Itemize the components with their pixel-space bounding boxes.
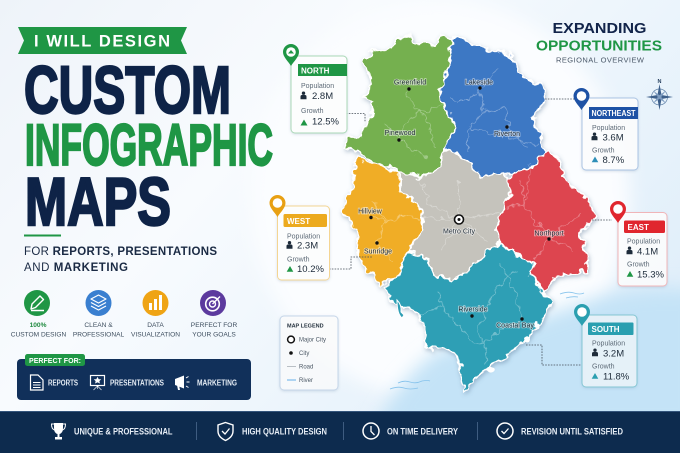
- icon: compass: [646, 79, 673, 110]
- city: Hillview: Hillview: [358, 208, 383, 216]
- legend: road: Road: [299, 364, 313, 370]
- card: north: Growth: [301, 108, 324, 115]
- legend: river: River: [299, 378, 313, 384]
- icon: 100% custom design: 100%: [30, 322, 47, 329]
- card: east: EAST: [628, 223, 649, 232]
- heading: expanding opportunities: REGIONAL OVERVIEW: [556, 56, 645, 64]
- card: west: Population: [287, 234, 320, 240]
- pin: north: [283, 44, 299, 66]
- title: custom infographic maps: CUSTOM: [24, 53, 231, 128]
- tag: perfect for: PERFECT FOR:: [29, 356, 81, 365]
- item: reports: [30, 375, 79, 390]
- icon: perfect for your goals: YOUR GOALS: [192, 332, 236, 338]
- item: marketing: [175, 376, 237, 390]
- city labels: [358, 80, 564, 330]
- heading: expanding opportunities: OPPORTUNITIES: [536, 38, 662, 54]
- card: northeast: 8.7%: [602, 155, 625, 166]
- card: west: Growth: [287, 256, 310, 264]
- icon: 100% custom design: CUSTOM DESIGN: [11, 332, 67, 338]
- card: northeast: Population: [592, 125, 625, 132]
- title: custom infographic maps: [24, 53, 273, 240]
- city: Northport: [534, 230, 564, 241]
- item: reports: REPORTS: [48, 378, 79, 388]
- city: Metro City: Metro City: [443, 228, 475, 236]
- region: north: [345, 35, 457, 177]
- rivers and roads: [372, 70, 580, 362]
- icon: clean and professional: [73, 290, 124, 338]
- card: north: NORTH: [301, 66, 330, 76]
- card: south: 3.2M: [603, 348, 624, 360]
- icon: perfect for your goals: [191, 290, 237, 338]
- pin: northeast: [574, 88, 590, 110]
- coastal islands: [397, 300, 530, 373]
- subtitle: AND MARKETING: [24, 262, 128, 274]
- banner: I will design: I WILL DESIGN: [34, 32, 170, 50]
- city: Pinewood: Pinewood: [385, 130, 415, 137]
- subtitle: FOR REPORTS, PRESENTATIONS: [24, 246, 217, 258]
- card: south: [574, 304, 637, 387]
- icon: perfect for your goals: PERFECT FOR: [191, 322, 237, 329]
- region: south: [385, 245, 552, 390]
- card: north: 2.8M: [312, 91, 333, 102]
- subtitle: [24, 246, 217, 274]
- card: west: WEST: [287, 217, 310, 226]
- footer bar: [0, 411, 680, 453]
- city: Greenfield: Greenfield: [394, 80, 426, 86]
- card: south: Growth: [592, 364, 615, 370]
- card: east: 4.1M: [637, 246, 658, 258]
- city: Metro City: [443, 215, 475, 236]
- legend: city: City: [299, 351, 309, 357]
- region: metro: [400, 150, 510, 280]
- city: Pinewood: [385, 130, 415, 142]
- city: Riverton: [494, 125, 520, 138]
- legend: MAP LEGEND: [287, 324, 324, 330]
- title: custom infographic maps: INFOGRAPHIC: [25, 113, 273, 178]
- item: unique and professional: UNIQUE & PROFESSIONAL: [74, 426, 173, 436]
- card: west: 2.3M: [297, 240, 318, 252]
- card: east: Population: [627, 238, 660, 246]
- card: east: [610, 201, 667, 286]
- pin: east: [610, 201, 626, 223]
- connectors: [329, 99, 612, 365]
- item: high quality design: [218, 422, 327, 440]
- icon: clean and professional: PROFESSIONAL: [73, 332, 124, 338]
- city: Sunridge: [364, 241, 392, 256]
- feature icons row: [11, 290, 237, 338]
- heading: expanding opportunities: EXPANDING: [552, 21, 646, 37]
- icon: 100% custom design: [11, 290, 67, 338]
- item: on time delivery: ON TIME DELIVERY: [387, 426, 458, 436]
- city: Riverside: Riverside: [458, 306, 488, 314]
- region: east: [497, 150, 595, 293]
- item: on time delivery: [363, 423, 458, 439]
- item: marketing: MARKETING: [197, 378, 237, 388]
- pin: south: [574, 304, 590, 326]
- item: high quality design: HIGH QUALITY DESIGN: [242, 426, 327, 436]
- city: Riverside: [458, 306, 488, 318]
- legend: major city: Major City: [299, 338, 326, 344]
- icon: data visualization: VISUALIZATION: [131, 332, 180, 338]
- region: northeast: [440, 37, 545, 177]
- item: unique and professional: [52, 423, 173, 440]
- city: Northport: Northport: [534, 230, 564, 238]
- card: northeast: Growth: [592, 148, 615, 154]
- card: northeast: NORTHEAST: [592, 109, 636, 118]
- card: east: Growth: [627, 262, 650, 268]
- card: south: Population: [592, 340, 625, 348]
- panel: perfect for: [17, 354, 251, 400]
- city: Lakeside: Lakeside: [465, 80, 493, 86]
- card: northeast: 3.6M: [602, 132, 624, 144]
- city: Greenfield: [394, 80, 426, 91]
- map: [340, 35, 595, 390]
- legend: [280, 316, 338, 390]
- icon: compass: N: [658, 79, 662, 85]
- city: Lakeside: [465, 80, 493, 90]
- tag: perfect for: [25, 354, 85, 366]
- icon: data visualization: [131, 290, 180, 338]
- region: west: [340, 156, 423, 285]
- card: northeast: [574, 88, 638, 170]
- card: west: 10.2%: [297, 264, 324, 275]
- pin: west: [270, 195, 286, 217]
- city: Sunridge: Sunridge: [364, 248, 392, 256]
- item: revision until satisfied: [497, 423, 623, 439]
- card: north: 12.5%: [312, 116, 339, 128]
- city: Coastal Bay: Coastal Bay: [496, 322, 534, 330]
- item: presentations: [90, 376, 165, 390]
- city: Coastal Bay: [496, 317, 534, 330]
- city: Riverton: Riverton: [494, 131, 520, 138]
- icon: data visualization: DATA: [147, 322, 164, 329]
- heading: expanding opportunities: [536, 21, 662, 64]
- card: north: Population: [301, 83, 334, 90]
- item: revision until satisfied: REVISION UNTIL SATISFIED: [521, 426, 623, 436]
- card: north: [283, 44, 347, 133]
- card: south: 11.8%: [603, 372, 630, 382]
- card: west: [270, 195, 330, 280]
- city: Hillview: [358, 208, 383, 219]
- icon: clean and professional: CLEAN &: [84, 322, 113, 329]
- title: custom infographic maps: MAPS: [25, 164, 171, 240]
- item: presentations: PRESENTATIONS: [110, 378, 165, 388]
- banner: I will design: [18, 27, 187, 54]
- water waves: [390, 292, 584, 389]
- card: south: SOUTH: [592, 325, 620, 334]
- card: east: 15.3%: [637, 270, 664, 280]
